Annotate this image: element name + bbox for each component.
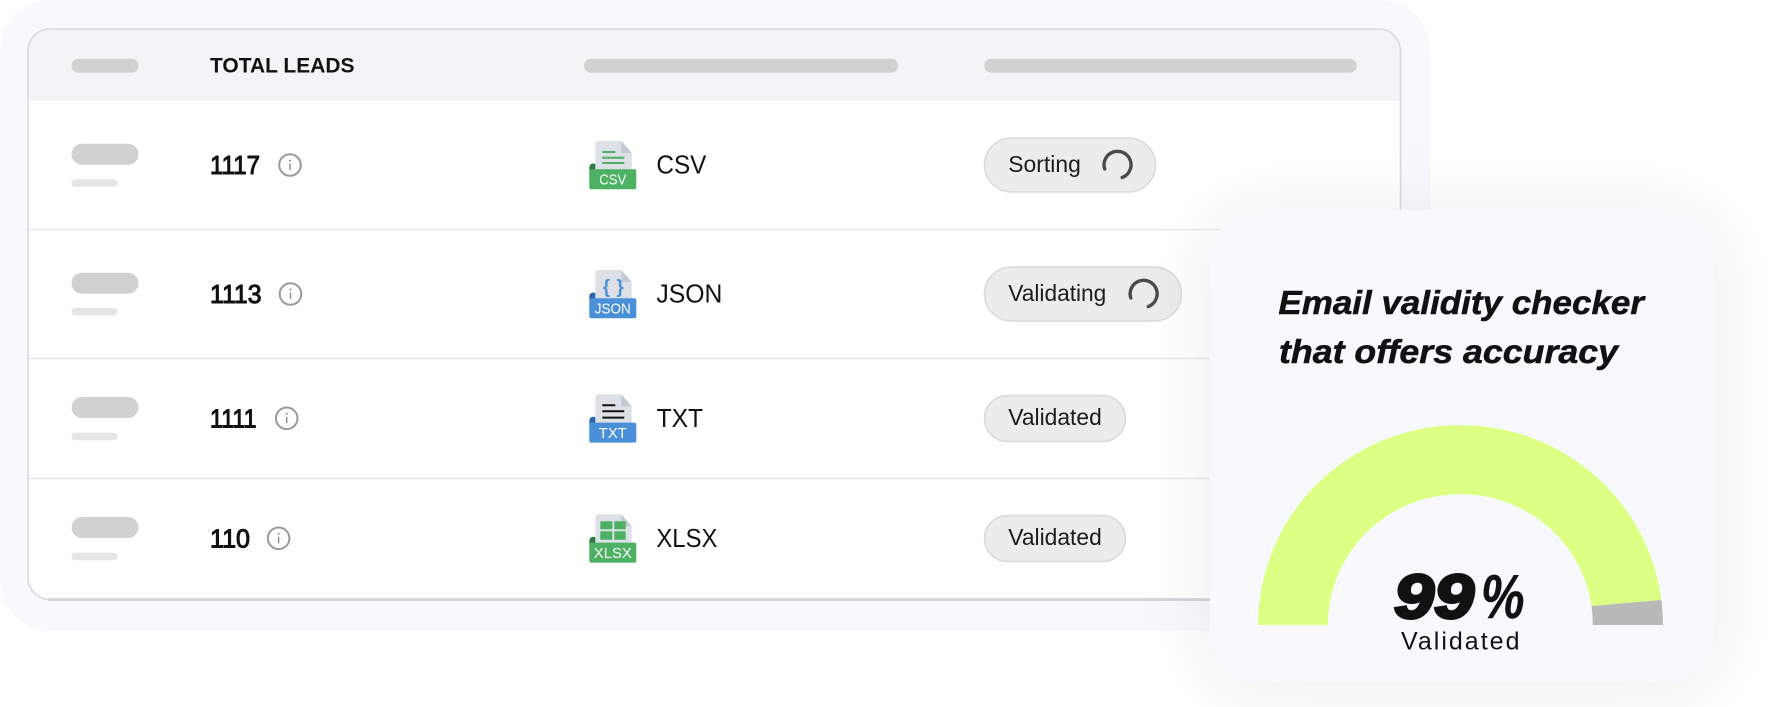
- icon: XLSX file: [589, 514, 636, 563]
- icon: info: [276, 408, 298, 429]
- status pill: sorting: Sorting: [1008, 151, 1081, 177]
- header placeholder 2: [584, 59, 898, 73]
- icon: JSON file: JSON: [595, 300, 631, 318]
- icon: CSV file: [589, 141, 636, 189]
- status pill: validated: [984, 516, 1126, 562]
- row 4 placeholder: [72, 517, 138, 560]
- gauge: validated arc: [1258, 425, 1661, 625]
- gauge value: 99: [1394, 563, 1475, 632]
- icon: info: [279, 154, 301, 176]
- status pill: validated: Validated: [1008, 404, 1102, 430]
- file type: XLSX: XLSX: [656, 523, 717, 553]
- icon: TXT file: TXT: [599, 425, 627, 442]
- card shadow: [1210, 215, 1715, 687]
- panel: outer table backdrop: [0, 0, 1430, 631]
- row 2 total: 1113: [210, 279, 262, 309]
- gauge value: %: [1481, 563, 1524, 632]
- header placeholder 3: [984, 59, 1357, 73]
- row 4: XLSX validated: [72, 514, 1126, 563]
- header: total leads: TOTAL LEADS: [210, 54, 354, 78]
- status pill: sorting: [984, 138, 1156, 192]
- table header row: [28, 29, 1400, 101]
- gauge label: Validated: [1401, 628, 1520, 656]
- status pill: validating: Validating: [1008, 280, 1106, 306]
- panel: leads table: [28, 29, 1400, 600]
- row 2 placeholder: [72, 273, 138, 316]
- row 1: CSV sorting: [72, 138, 1156, 192]
- icon: XLSX file: XLSX: [594, 545, 632, 562]
- row 3: TXT validated: [72, 394, 1126, 443]
- icon: TXT file: [589, 394, 636, 443]
- panel: accuracy card: [1210, 210, 1715, 683]
- row 3 placeholder: [72, 397, 138, 440]
- file type: JSON: JSON: [656, 278, 722, 308]
- gauge value: [1394, 563, 1524, 632]
- header placeholder 1: [72, 59, 138, 73]
- card heading: Email validity checker: [1278, 284, 1646, 321]
- icon: CSV file: CSV: [599, 172, 626, 188]
- status pill: validating: [984, 267, 1182, 321]
- row 1 total: 1117: [210, 150, 260, 180]
- icon: JSON file: { }: [603, 277, 624, 298]
- file type: CSV: CSV: [656, 150, 707, 180]
- card heading: [1278, 284, 1646, 370]
- icon: info: [280, 283, 301, 305]
- row 4 total: 110: [210, 523, 250, 553]
- gauge chart: [1258, 425, 1663, 625]
- status pill: validated: Validated: [1008, 524, 1102, 550]
- row 1 placeholder: [72, 144, 138, 187]
- row 2: JSON validating: [72, 267, 1182, 321]
- icon: info: [268, 528, 289, 549]
- icon: JSON file: [589, 270, 636, 318]
- icon: spinner: [1104, 151, 1131, 178]
- status pill: validated: [984, 396, 1126, 442]
- card heading: that offers accuracy: [1279, 333, 1620, 370]
- gauge: remainder arc: [1592, 600, 1663, 625]
- icon: spinner: [1130, 280, 1157, 306]
- row 3 total: 1111: [210, 403, 256, 433]
- file type: TXT: TXT: [657, 403, 703, 433]
